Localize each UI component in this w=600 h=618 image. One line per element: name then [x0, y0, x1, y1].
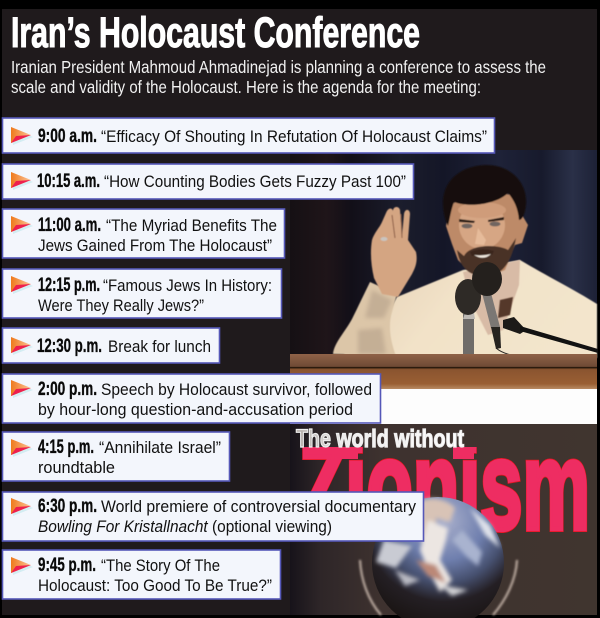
curtain backdrop	[290, 150, 597, 355]
podium	[290, 354, 597, 389]
agenda item: 12:30 p.m.	[2, 328, 220, 363]
head	[443, 165, 528, 276]
agenda item: 12:30 p.m.: 12:30 p.m.	[37, 336, 102, 357]
agenda item: 9:00 a.m.	[2, 118, 494, 153]
poster heading: The world without	[296, 425, 465, 453]
photo: speaker at podium	[290, 150, 598, 389]
agenda item: 9:45 p.m.: Holocaust: Too Good To Be True?”	[38, 577, 272, 595]
agenda item: 11:00 a.m.	[2, 209, 284, 258]
microphones	[455, 262, 598, 358]
agenda item: 2:00 p.m.: Speech by Holocaust survivor, followed	[101, 381, 372, 399]
poster panel	[290, 417, 597, 618]
agenda item: 6:30 p.m.	[2, 492, 424, 541]
agenda item: 2:00 p.m.: by hour-long question-and-accusation period	[38, 401, 353, 419]
agenda item: 10:15 a.m.	[2, 164, 414, 199]
agenda item: 9:45 p.m.: 9:45 p.m.	[38, 555, 96, 576]
agenda item: 12:30 p.m.: Break for lunch	[108, 338, 211, 356]
sleeve shadow	[358, 290, 392, 354]
intro text	[11, 57, 546, 97]
agenda item: 10:15 a.m.: “How Counting Bodies Gets Fuzzy Past 100”	[104, 173, 406, 191]
earth globe	[372, 497, 504, 618]
agenda item: 11:00 a.m.: 11:00 a.m.	[38, 215, 101, 236]
agenda item: 4:15 p.m.	[2, 432, 230, 481]
agenda item: 9:45 p.m.: “The Story Of The	[101, 557, 220, 575]
agenda item: 4:15 p.m.: roundtable	[38, 459, 115, 477]
agenda item: 4:15 p.m.: “Annihilate Israel”	[99, 439, 221, 457]
agenda item: 9:00 a.m.: 9:00 a.m.	[38, 126, 97, 147]
title: Iran’s Holocaust Conference	[11, 9, 420, 57]
agenda item: 12:15 p.m.: 12:15 p.m.	[38, 275, 100, 296]
agenda item: 9:45 p.m.	[2, 550, 280, 599]
poster word: Zionism	[302, 447, 588, 533]
agenda item: 11:00 a.m.: “The Myriad Benefits The	[106, 217, 277, 235]
agenda item: 12:15 p.m.: Were They Really Jews?”	[38, 297, 204, 315]
sleeve	[333, 282, 397, 356]
agenda item: 12:15 p.m.: “Famous Jews In History:	[103, 277, 272, 295]
agenda item: 9:00 a.m.: “Efficacy Of Shouting In Refutation Of Holocaust Claims”	[101, 128, 487, 146]
white strip	[290, 389, 597, 425]
raised hand	[371, 207, 417, 297]
agenda item: 11:00 a.m.: Jews Gained From The Holocaust”	[38, 237, 272, 255]
agenda item: 6:30 p.m.: 6:30 p.m.	[38, 496, 97, 517]
jacket	[340, 260, 597, 358]
intro text: scale and validity of the Holocaust. Here is the agenda for the meeting:	[11, 77, 481, 97]
agenda item: 10:15 a.m.: 10:15 a.m.	[37, 171, 100, 192]
agenda item: 6:30 p.m.: World premiere of controversial documentary	[101, 498, 417, 516]
agenda item: 2:00 p.m.	[2, 374, 380, 423]
bubble outline	[360, 560, 517, 615]
agenda item: 6:30 p.m.: Bowling For Kristallnacht (optional viewing)	[38, 518, 332, 536]
agenda item: 12:15 p.m.	[2, 269, 282, 318]
agenda item: 2:00 p.m.: 2:00 p.m.	[38, 379, 97, 400]
collar shadow	[498, 297, 513, 318]
shirt	[463, 260, 520, 335]
agenda item: 4:15 p.m.: 4:15 p.m.	[38, 437, 94, 458]
